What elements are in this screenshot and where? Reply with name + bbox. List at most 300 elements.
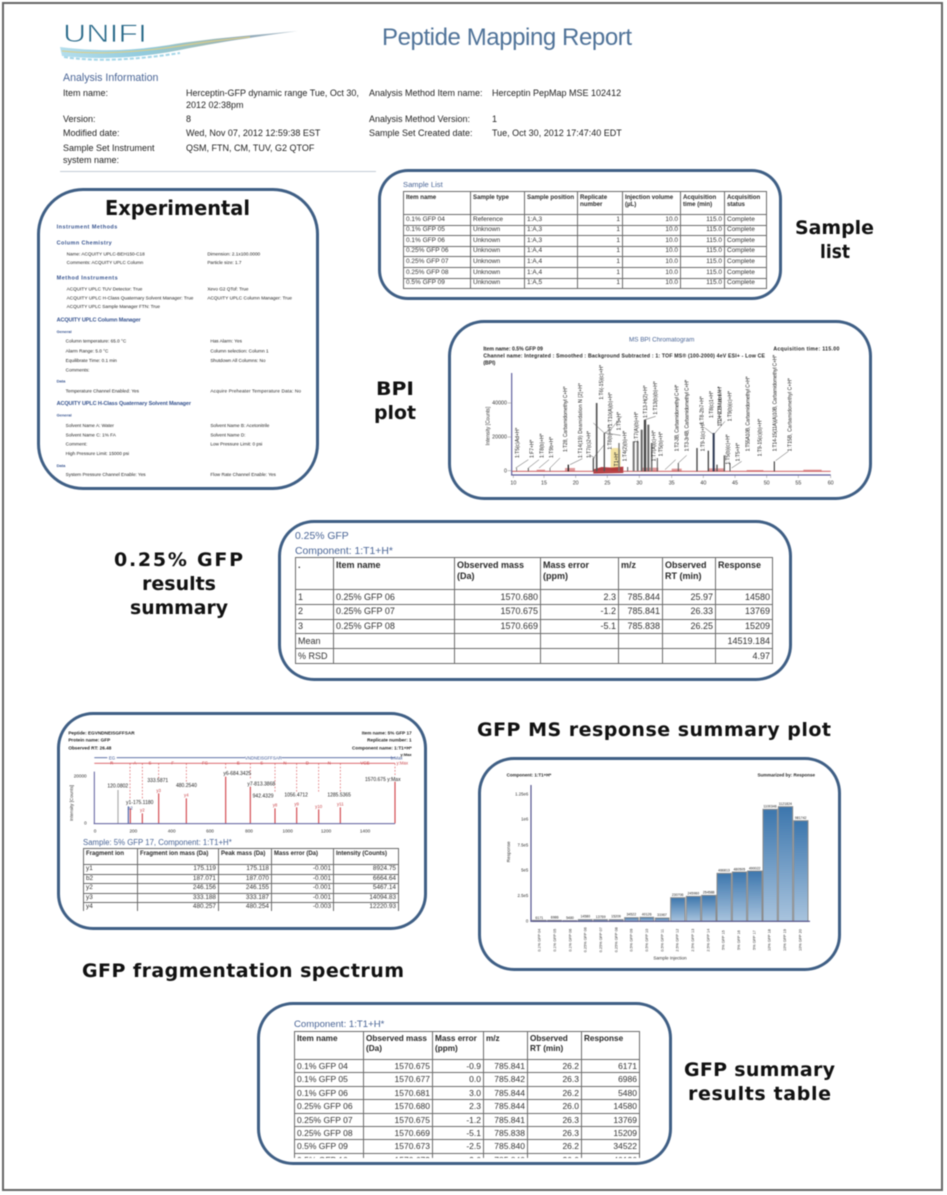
sample labels: 2.5% GFP 14 <box>706 928 710 952</box>
peak labels: 1:T7(A)(c)+H* <box>652 430 658 461</box>
summary table: 785.844 <box>494 1101 525 1111</box>
results table: 2.3 <box>603 592 616 602</box>
value labels: 6986 <box>551 916 559 920</box>
spectrum chart: 0 <box>84 820 87 825</box>
spectrum chart: VNDNEISGFFSAR <box>245 755 282 760</box>
spectrum chart: 1400 <box>360 828 371 833</box>
instrument method text: ACQUITY UPLC TUV Detector: True <box>67 287 143 292</box>
peak labels: 1285.5365 <box>327 793 351 799</box>
summary table: 1570.681 <box>395 1088 430 1098</box>
sample labels: 5% GFP 15 <box>722 930 726 950</box>
value labels: 1121824 <box>779 802 792 806</box>
fragment ion table: 175.118 <box>246 865 269 872</box>
value labels: 40126 <box>642 912 652 916</box>
sample list table <box>402 190 768 290</box>
instrument method text: Solvent Name A: Water <box>66 423 114 428</box>
sample list table: 10.0 <box>665 269 678 276</box>
table captions: 0.25% GFP <box>295 531 349 542</box>
instrument method text: ACQUITY UPLC Sample Manager FTN: True <box>67 304 160 309</box>
spectrum chart: Intensity [Counts] <box>69 785 74 821</box>
sample list table: 115.0 <box>706 237 722 244</box>
fragment ion table: 175.119 <box>193 865 216 872</box>
heading: 0.25% GFP results summary: results <box>142 573 216 595</box>
spectrum chart: N <box>283 761 287 766</box>
sample list table: Item name <box>406 194 436 201</box>
sample list table: 115.0 <box>706 269 722 276</box>
analysis information: Analysis Method Item name: <box>369 88 483 98</box>
summary table: 15209 <box>613 1128 637 1138</box>
summary table: 0.1% GFP 04 <box>297 1061 348 1071</box>
heading: GFP MS response summary plot: GFP MS response summary plot <box>477 719 831 741</box>
peak labels: 1:T8(b)+H* <box>540 433 546 458</box>
sample labels: 0.1% GFP 04 <box>538 928 542 952</box>
peak labels: 1:T5(b)(c)+H* <box>726 434 732 465</box>
instrument method text: Solvent Name D: <box>210 432 246 437</box>
leader lines <box>516 416 788 470</box>
summary table: 1570.677 <box>395 1074 430 1084</box>
heading: GFP summary results table: GFP summary <box>684 1059 836 1081</box>
bar chart: 0 <box>526 918 529 923</box>
instrument method text: System Pressure Channel Enable: Yes <box>66 472 146 477</box>
sample list table: 1 <box>616 226 620 233</box>
summary table: 0.25% GFP 08 <box>297 1128 353 1138</box>
sample list table: Complete <box>727 237 755 244</box>
instrument method text: Alarm Range: 5.0 °C <box>66 349 109 354</box>
bar chart: 7.5e5 <box>517 842 529 847</box>
instrument method text: Acquire Preheater Temperature Data: No <box>210 388 301 393</box>
fragment ion table <box>82 847 400 912</box>
fragment ion table: -0.001 <box>313 894 331 901</box>
instrument method text: Flow Rate Channel Enable: Yes <box>210 472 276 477</box>
summary table: 1570.673 <box>395 1141 430 1151</box>
fragment ion table: 246.156 <box>193 884 216 891</box>
peak labels: 1570.675 y:Max <box>365 777 401 783</box>
title: Peptide Mapping Report <box>382 24 632 51</box>
peak labels: y6-684.3425 <box>223 771 251 777</box>
sample list table: 10.0 <box>665 237 678 244</box>
panel: experimental <box>37 188 319 490</box>
results table: Item name <box>336 560 381 570</box>
instrument method text: Equilibrate Time: 0.1 min <box>66 358 117 363</box>
heading: 0.25% GFP results summary: 0.25% GFP <box>114 549 243 571</box>
value labels: 14580 <box>580 915 590 919</box>
peak labels: y1-175.1180 <box>126 800 154 806</box>
results table: 1570.669 <box>500 621 538 631</box>
sample list table: 115.0 <box>706 258 722 265</box>
sample list table: 1 <box>616 247 620 254</box>
sample labels: 0.1% GFP 05 <box>553 929 557 952</box>
fragment ion table: 333.187 <box>246 894 269 901</box>
summary table: m/z <box>486 1034 500 1043</box>
peak labels: 1:T5+H* <box>617 412 623 430</box>
results table: Mass error (ppm) <box>543 560 589 581</box>
sample list table: 1:A,3 <box>527 226 542 233</box>
sample list table: Unknown <box>473 279 500 286</box>
analysis information: QSM, FTN, CM, TUV, G2 QTOF <box>186 143 314 153</box>
summary table: 26.3 <box>562 1128 579 1138</box>
fragment ion table: Intensity (Counts) <box>336 851 387 857</box>
sample list table: Acquisition time (min) <box>683 194 716 208</box>
sample labels: 0.25% GFP 07 <box>599 927 603 952</box>
fragment ion table: 246.155 <box>246 884 269 891</box>
results table <box>294 556 774 665</box>
summary table: Item name <box>297 1034 338 1043</box>
sample labels: 10% GFP 18 <box>768 929 772 951</box>
spectrum chart: y10 <box>315 804 323 809</box>
peak labels: 1:T13-H(2)+H* <box>643 385 649 418</box>
value labels: 6171 <box>535 916 543 920</box>
spectrum chart: FG <box>202 761 209 766</box>
summary table: 26.2 <box>562 1088 579 1098</box>
peak labels: 1:T7(c)2+H* <box>586 431 592 458</box>
BPI chart: 20 <box>573 480 579 486</box>
analysis information: 1 <box>492 114 497 124</box>
value labels: 15209 <box>611 915 621 919</box>
sample labels: 10% GFP 20 <box>798 929 802 951</box>
results table: % RSD <box>298 650 328 660</box>
spectrum chart: 1200 <box>321 828 332 833</box>
sample list table: 1 <box>616 269 620 276</box>
heading: GFP summary results table: results table <box>688 1083 831 1105</box>
fragment ion table: y4 <box>86 903 93 910</box>
instrument method text: Comments: <box>66 367 89 372</box>
fragment ion table: Mass error (Da) <box>274 851 318 857</box>
sample list table: Reference <box>473 216 503 223</box>
instrument method text: General <box>57 329 72 334</box>
summary table: 785.840 <box>494 1141 525 1151</box>
sample list table: 1:A,4 <box>527 258 542 265</box>
panel: GFP MS response summary plot <box>478 757 841 971</box>
spectrum chart: Replicate number: 1 <box>367 738 412 743</box>
spectrum chart: Item name: 5% GFP 17 <box>362 730 412 735</box>
sample list table: Complete <box>727 269 755 276</box>
summary table: 26.3 <box>562 1074 579 1084</box>
results table: 1570.680 <box>500 592 538 602</box>
summary table: 0.1% GFP 06 <box>297 1088 348 1098</box>
sample list table: 0.25% GFP 07 <box>406 258 449 265</box>
instrument method text: Temperature Channel Enabled: Yes <box>66 388 140 393</box>
peak labels: 1:T8(c)1+H* <box>709 391 715 418</box>
value labels: 466813 <box>718 869 730 873</box>
sample labels: 5% GFP 17 <box>752 930 756 950</box>
bar chart: Component: 1:T1+H* <box>507 773 552 778</box>
sample list table: 115.0 <box>706 247 722 254</box>
sample list table: Complete <box>727 279 755 286</box>
heading: Experimental: Experimental <box>105 196 250 220</box>
results table: Observed mass (Da) <box>457 560 524 581</box>
sample labels: 10% GFP 19 <box>783 929 787 951</box>
instrument method text: ACQUITY UPLC H-Class Quaternary Solvent Manager: True <box>67 295 194 300</box>
BPI chart: 15 <box>541 480 547 486</box>
summary table: 0.25% GFP 07 <box>297 1114 353 1124</box>
analysis information <box>60 72 622 172</box>
fragment ion table: 6664.64 <box>373 875 396 882</box>
summary table: 2.3 <box>469 1101 481 1111</box>
peak labels: y7-813.3868 <box>247 782 275 788</box>
spectrum chart: y:Max <box>397 761 409 766</box>
results table: -5.1 <box>600 621 616 631</box>
value labels: 31967 <box>657 913 667 917</box>
BPI chart: MS BPI Chromatogram <box>629 336 694 343</box>
spectrum chart: EG <box>109 755 116 760</box>
summary table: 6171 <box>618 1061 637 1071</box>
summary table: 26.2 <box>562 1061 579 1071</box>
results table: 1570.675 <box>500 606 538 616</box>
summary table: 1570.675 <box>395 1114 430 1124</box>
analysis information: Herceptin-GFP dynamic range Tue, Oct 30, <box>186 88 359 98</box>
sample list table: 1:A,3 <box>527 216 542 223</box>
value labels: 254588 <box>703 891 715 895</box>
bar chart: 1.25e6 <box>515 791 529 796</box>
analysis information: 8 <box>186 114 191 124</box>
sample list table: Unknown <box>473 258 500 265</box>
instrument method text: Instrument Methods <box>57 225 117 231</box>
peak labels: T1+H* <box>614 452 620 466</box>
results table: 0.25% GFP 08 <box>336 621 395 631</box>
spectrum chart: y3 <box>156 788 162 793</box>
summary table <box>293 1030 641 1159</box>
results table: 26.33 <box>690 606 713 616</box>
spectrum chart: 800 <box>245 828 253 833</box>
summary table: Mass error (ppm) <box>435 1034 477 1053</box>
peak labels: 1:T4(2)(b)+H* <box>622 431 628 461</box>
instrument method text: Low Pressure Limit: 0 psi <box>210 442 262 447</box>
results table: 4.97 <box>752 650 770 660</box>
instrument method text: Method Instruments <box>57 276 118 282</box>
spectrum chart: Peptide: EGVNDNEISGFFSAR <box>68 730 135 735</box>
panel: sample list <box>378 169 782 300</box>
peak labels: 1:T28, Carbamidomethyl C+H* <box>563 386 569 452</box>
results table: 3 <box>298 621 303 631</box>
BPI chart: 40 <box>700 480 706 486</box>
axes <box>94 772 395 824</box>
analysis information: Analysis Method Version: <box>369 114 470 124</box>
peak labels: 120.0802 <box>107 783 128 789</box>
results table: 785.838 <box>627 621 660 631</box>
BPI chart: 35 <box>669 480 675 486</box>
peak labels: 1:T8(b)+H* <box>608 425 614 450</box>
bar chart: 5e5 <box>521 868 529 873</box>
fragment ion table: 187.071 <box>193 875 216 882</box>
spectrum chart <box>68 730 412 834</box>
summary table: -1.2 <box>466 1114 481 1124</box>
summary table: 785.842 <box>494 1074 525 1084</box>
sample list table: 10.0 <box>665 247 678 254</box>
value labels: 230706 <box>672 893 684 897</box>
peak labels: 1:T15B, Carbamidomethyl C+H* <box>787 378 793 451</box>
results table: 13769 <box>745 606 770 616</box>
spectrum chart: D <box>306 761 309 766</box>
instrument method text: Solvent Name C: 1% FA <box>66 432 117 437</box>
peak labels: 1:T12+H2OB Mutation M+H* <box>717 386 723 426</box>
sample list table: Unknown <box>473 237 500 244</box>
sample list table: Injection volume (µL) <box>625 194 673 208</box>
spectrum chart: R <box>110 761 113 766</box>
sample labels: 5% GFP 16 <box>737 930 741 950</box>
heading: GFP summary results table <box>684 1059 836 1105</box>
peak labels: 1:T55A10B, Carbamidomethyl C+H* <box>746 376 752 451</box>
bar chart: Summarized by: Response <box>757 773 815 778</box>
peak labels: 333.5871 <box>147 778 168 784</box>
spectrum chart: F <box>171 761 174 766</box>
sample list table: 10.0 <box>665 216 678 223</box>
spectrum chart: 400 <box>168 828 176 833</box>
spectrum chart: Protein name: GFP <box>68 738 110 743</box>
BPI chart: 20000 <box>492 435 507 441</box>
bar chart: Response <box>506 841 511 862</box>
analysis information: Modified date: <box>63 128 120 138</box>
analysis information: Item name: <box>63 88 108 98</box>
peak labels: 1:T9-1(c)+H* <box>701 423 707 451</box>
peak labels: 1:T8-2b7+H* <box>699 396 705 425</box>
sample list table: 1 <box>616 258 620 265</box>
sample list table: Unknown <box>473 226 500 233</box>
sample list table: Acquisition status <box>727 194 760 208</box>
spectrum chart: S <box>149 761 152 766</box>
peak labels: 1:T7(A)(b)+H* <box>634 412 640 443</box>
axes <box>511 373 831 475</box>
instrument method text <box>57 225 301 477</box>
sample labels: 0.5% GFP 10 <box>645 929 649 952</box>
sample list table: Sample position <box>527 194 574 201</box>
logo: UNIFI <box>60 20 295 62</box>
value labels: 245960 <box>687 892 699 896</box>
spectrum chart: b:Max <box>391 755 403 760</box>
bar chart: 2.5e5 <box>517 893 529 898</box>
fragment ion table: -0.001 <box>313 884 331 891</box>
value labels: 1100346 <box>763 805 777 809</box>
analysis information: 2012 02:38pm <box>186 100 244 110</box>
sample labels <box>538 927 802 952</box>
sample list table: 1:A,4 <box>527 269 542 276</box>
sample list table: Unknown <box>473 269 500 276</box>
results table: 14519.184 <box>727 636 770 646</box>
BPI chart: 10 <box>510 480 516 486</box>
heading: BPI plot: BPI <box>376 378 414 400</box>
axes <box>530 785 810 922</box>
fragment ion table: b2 <box>86 875 93 882</box>
fragment ion table: y3 <box>86 894 93 901</box>
fragment ion table: Peak mass (Da) <box>221 851 265 857</box>
summary table: 1570.680 <box>395 1101 430 1111</box>
spectrum chart: 20000 <box>74 773 87 778</box>
results table: 0.25% GFP 06 <box>336 592 395 602</box>
spectrum chart: Component name: 1:T1+H* <box>352 745 412 750</box>
results table: 26.25 <box>690 621 713 631</box>
summary table: 13769 <box>613 1114 637 1124</box>
sample list table: 115.0 <box>706 279 722 286</box>
fragment ion table: 5467.14 <box>373 884 396 891</box>
BPI chart: 50 <box>764 480 770 486</box>
bars <box>532 807 808 921</box>
bar chart: Sample Injection <box>653 955 687 960</box>
peak labels: 1:T9b+H* <box>549 437 555 458</box>
instrument method text: ACQUITY UPLC Column Manager <box>57 318 142 324</box>
sample list table: Replicate number <box>580 194 607 208</box>
spectrum chart: b2 <box>128 805 133 810</box>
summary table: 1570.675 <box>395 1061 430 1071</box>
instrument method text: Column selection: Column 1 <box>210 349 269 354</box>
heading: GFP fragmentation spectrum: GFP fragmentation spectrum <box>82 960 404 982</box>
BPI chart: 30 <box>636 480 642 486</box>
sample list table: Unknown <box>473 247 500 254</box>
instrument method text: Shutdown All Columns: No <box>210 358 266 363</box>
summary table: 0.5% GFP 09 <box>297 1141 348 1151</box>
peak labels: 1:T5(c)Ad+H* <box>515 428 521 458</box>
spectrum chart: y4 <box>184 793 189 798</box>
table captions: Component: 1:T1+H* <box>295 546 393 556</box>
value labels: 490022 <box>749 866 761 870</box>
sample list table: 1 <box>616 279 620 286</box>
BPI chart: 55 <box>795 480 801 486</box>
spectrum chart: y9 <box>294 802 300 807</box>
results table: 2 <box>298 606 303 616</box>
spectrum chart: y11 <box>337 802 344 807</box>
BPI chart: 25 <box>604 480 610 486</box>
results table: 785.844 <box>627 592 660 602</box>
BPI chart: 40000 <box>492 401 507 407</box>
fragment ion table: -0.001 <box>313 875 331 882</box>
summary table: 0.1% GFP 05 <box>297 1074 348 1084</box>
heading: 0.25% GFP results summary <box>114 549 243 619</box>
analysis information: Sample Set Created date: <box>369 128 473 138</box>
logo: UNIFI: UNIFI <box>63 20 147 48</box>
sample list table: Complete <box>727 226 755 233</box>
spectrum chart: 0 <box>94 828 97 833</box>
sample list table: 1:A,3 <box>527 237 542 244</box>
summary table: 34522 <box>613 1141 637 1151</box>
summary table: Observed RT (min) <box>530 1034 568 1053</box>
summary table: 0.0 <box>469 1074 481 1084</box>
table captions <box>294 531 394 556</box>
results table: 785.841 <box>627 606 660 616</box>
results table: 0.25% GFP 07 <box>336 606 395 616</box>
summary table: 785.841 <box>494 1061 525 1071</box>
fragment ion table: 14094.83 <box>369 894 396 901</box>
table caption: Sample: 5% GFP 17, Component: 1:T1+H* <box>83 838 232 847</box>
sample labels: 0.25% GFP 08 <box>614 927 618 952</box>
results table: m/z <box>621 560 636 570</box>
sample list table: 10.0 <box>665 279 678 286</box>
fragment ion table: 8924.75 <box>373 865 396 872</box>
BPI chart: 45 <box>732 480 738 486</box>
results table: Mean <box>298 636 321 646</box>
peak labels: 1:F7+H* <box>530 439 536 458</box>
peak labels: 1:T2-3B, Carbamidomethyl C+H* <box>675 385 681 451</box>
sample labels: 2.5% GFP 13 <box>691 929 695 952</box>
sample list table: Sample type <box>473 194 509 201</box>
sample list caption: Sample List <box>403 180 443 189</box>
instrument method text: Comments: ACQUITY UPLC Column <box>67 260 144 265</box>
instrument method text: Has Alarm: Yes <box>210 339 243 344</box>
sample labels: 0.5% GFP 11 <box>660 929 664 952</box>
analysis information: Tue, Oct 30, 2012 17:47:40 EDT <box>492 128 622 138</box>
spectrum chart: y2 <box>140 808 145 813</box>
analysis information: Analysis Information <box>63 72 158 84</box>
BPI chart <box>482 336 840 486</box>
instrument method text: ACQUITY UPLC Column Manager: True <box>207 295 292 300</box>
results table: 25.97 <box>690 592 713 602</box>
BPI chart: 60 <box>828 480 834 486</box>
analysis information: Version: <box>63 114 96 124</box>
instrument method text: Dimension: 2.1x100.0000 <box>207 251 261 256</box>
sample list table: 0.25% GFP 06 <box>406 247 449 254</box>
peak labels: 942.4329 <box>253 793 274 799</box>
fragment ion table: y2 <box>86 884 93 891</box>
panel: GFP summary results table <box>257 1002 672 1165</box>
sample list table: 10.0 <box>665 258 678 265</box>
value labels: 981742 <box>795 816 807 820</box>
